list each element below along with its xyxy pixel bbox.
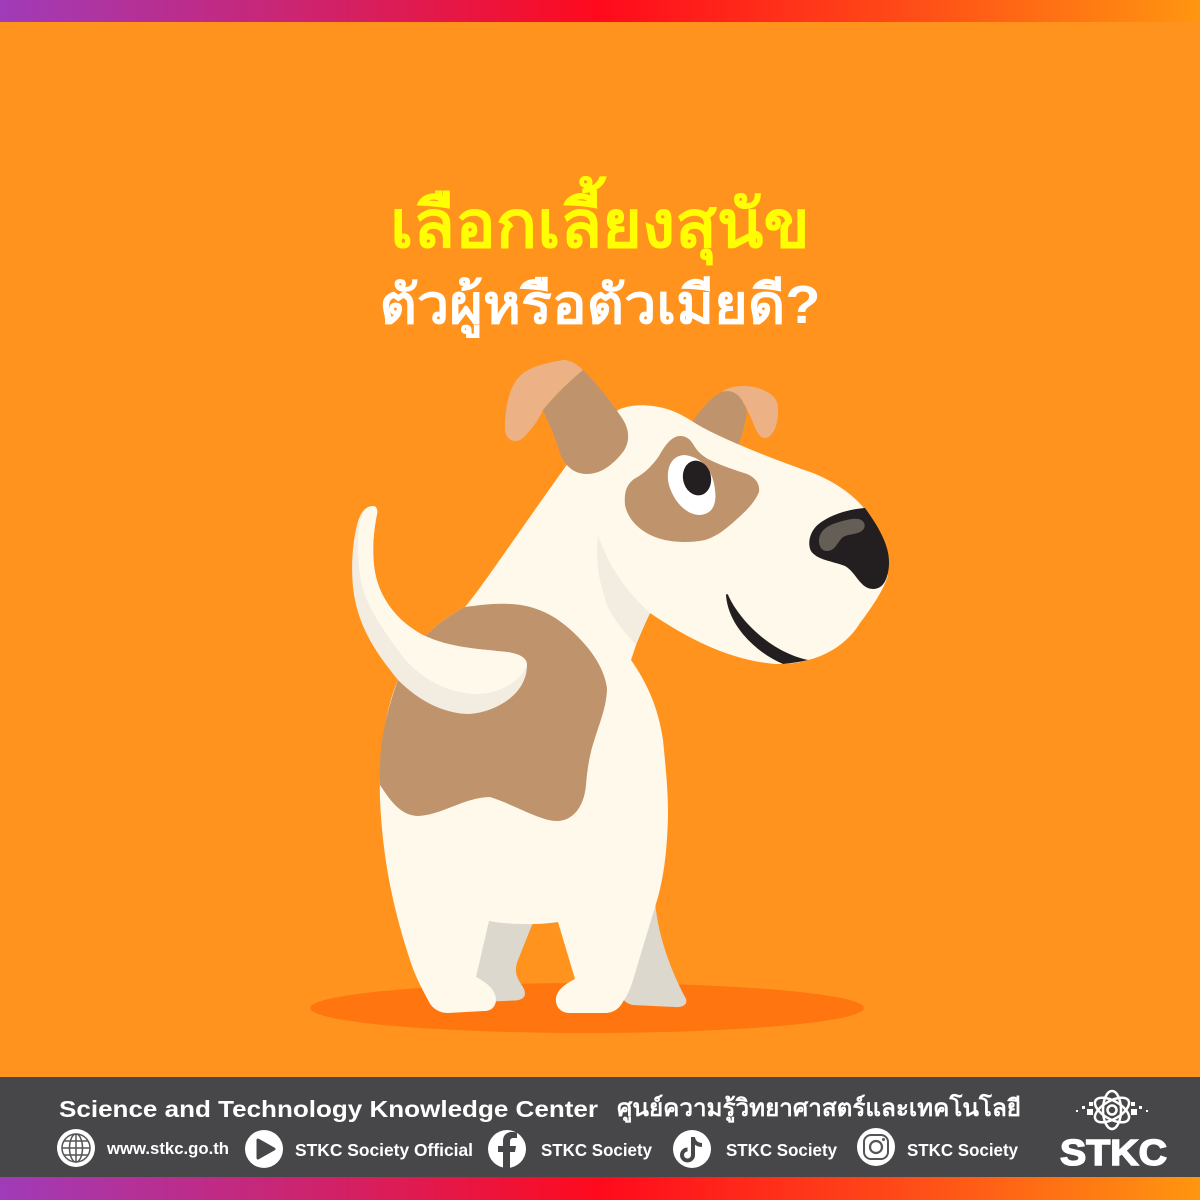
eye <box>668 455 715 515</box>
bottom gradient bar <box>0 1177 1200 1200</box>
title: เลือกเลี้ยงสุนัข <box>390 175 810 266</box>
icon: tiktok <box>673 1130 711 1168</box>
logo wordmark: STKC <box>1060 1132 1167 1173</box>
eye patch <box>625 436 759 542</box>
back legs <box>470 900 686 1007</box>
logo: STKC <box>1060 1091 1167 1173</box>
tiktok name: STKC Society <box>726 1140 837 1160</box>
icon: video play <box>245 1130 283 1168</box>
footer heading English: Science and Technology Knowledge Center <box>59 1096 598 1122</box>
top gradient bar <box>0 0 1200 22</box>
title: ตัวผู้หรือตัวเมียดี? <box>380 275 820 338</box>
instagram name: STKC Society <box>907 1140 1018 1160</box>
icon: website globe <box>57 1129 95 1167</box>
nose <box>809 508 889 589</box>
mouth <box>726 594 808 664</box>
website link: www.stkc.go.th <box>106 1140 229 1158</box>
neck shading <box>597 535 650 645</box>
back patch <box>380 604 607 821</box>
footer band <box>0 1077 1200 1177</box>
dog illustration <box>352 360 889 1013</box>
far ear <box>690 386 778 448</box>
tail <box>352 506 527 714</box>
title <box>380 175 820 338</box>
body and head <box>380 405 888 1013</box>
logo atom mark <box>1091 1091 1133 1129</box>
icon: facebook <box>488 1130 526 1168</box>
facebook name: STKC Society <box>541 1140 652 1160</box>
video channel: STKC Society Official <box>295 1140 473 1160</box>
footer heading Thai: ศูนย์ความรู้วิทยาศาสตร์และเทคโนโลยี <box>617 1093 1021 1123</box>
near ear <box>505 360 628 474</box>
icon: instagram <box>857 1128 895 1166</box>
ground shadow <box>310 983 864 1033</box>
